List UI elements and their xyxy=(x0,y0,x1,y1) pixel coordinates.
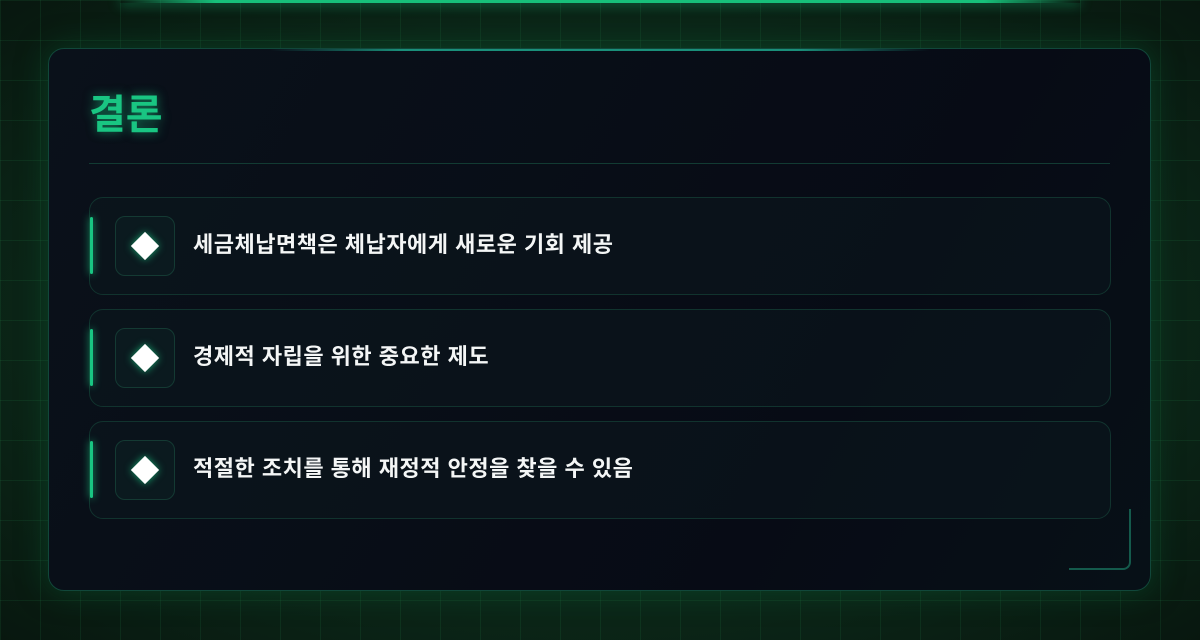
icon: diamond xyxy=(115,440,175,500)
panel: conclusion card xyxy=(48,48,1151,591)
text 3: 적절한 조치를 통해 재정적 안정을 찾을 수 있음 xyxy=(193,456,633,481)
text 1: 세금체납면책은 체납자에게 새로운 기회 제공 xyxy=(193,232,614,257)
item 3 xyxy=(89,421,1111,519)
title: 결론 xyxy=(89,93,163,137)
item 2 xyxy=(89,309,1111,407)
corner bracket decoration xyxy=(1069,509,1131,570)
text 2: 경제적 자립을 위한 중요한 제도 xyxy=(193,344,489,369)
icon: diamond xyxy=(115,216,175,276)
icon: diamond xyxy=(115,328,175,388)
item 1 xyxy=(89,197,1111,295)
